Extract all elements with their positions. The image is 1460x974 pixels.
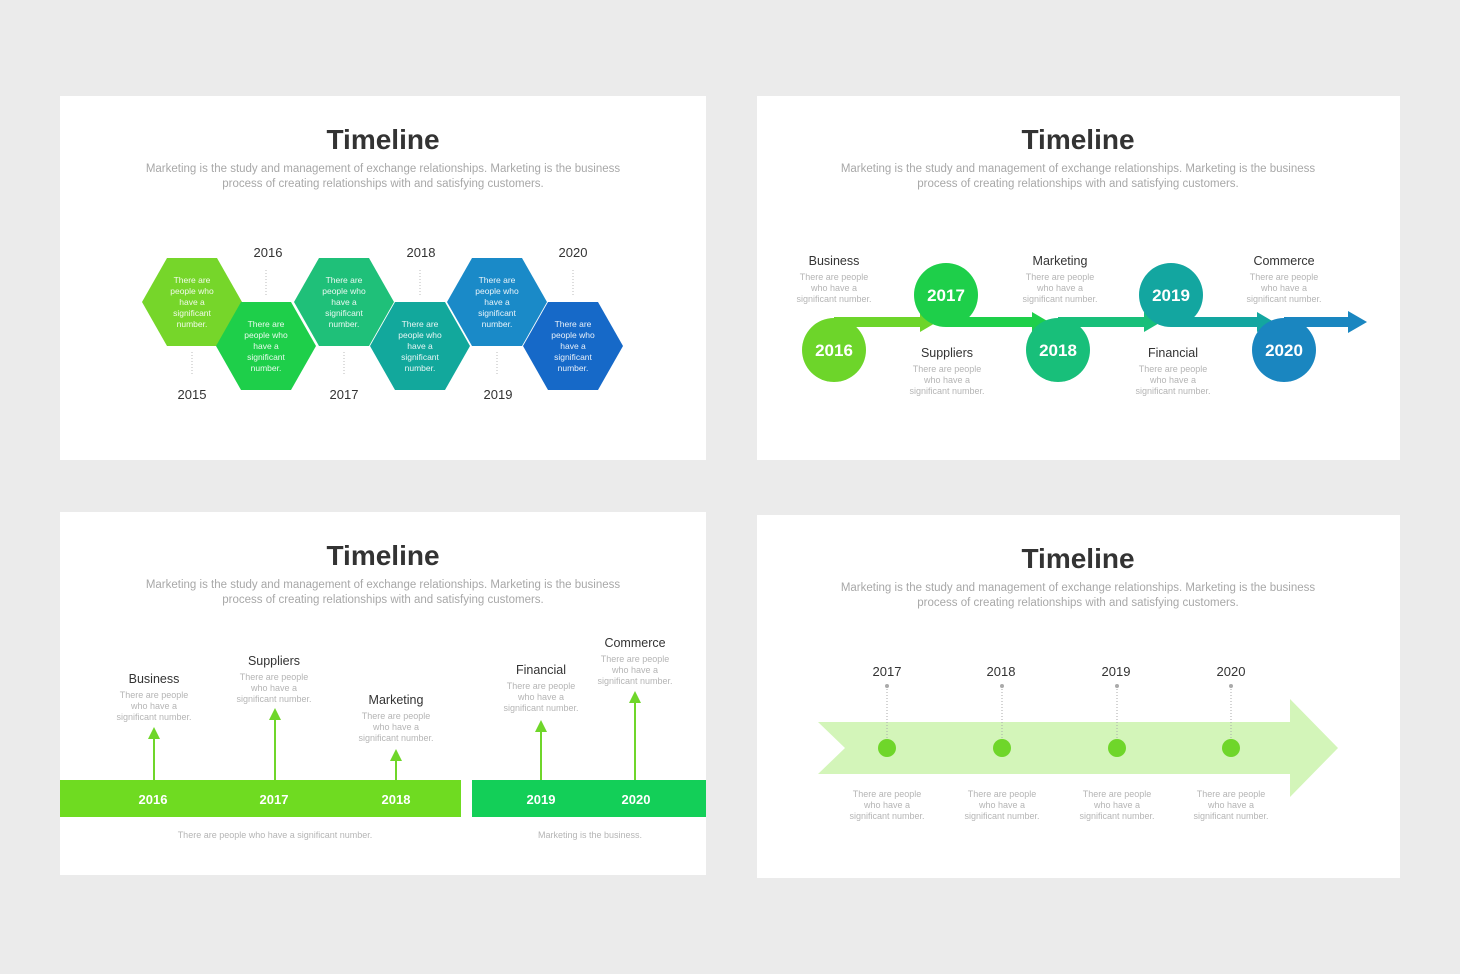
milestones: 2017 [873, 664, 901, 679]
labels: who have a [810, 283, 857, 293]
hexagons: have a [407, 341, 433, 351]
milestones: who have a [978, 800, 1025, 810]
hexagons: people who [475, 286, 519, 296]
subtitle: process of creating relationships with and satisfying customers. [222, 178, 544, 190]
title: Timeline [326, 124, 440, 155]
milestones: There are people [1197, 789, 1265, 799]
hexagons: There are [479, 275, 516, 285]
milestones: There are people [853, 789, 921, 799]
subtitle [841, 582, 1315, 609]
circles: 2020 [1265, 341, 1303, 360]
milestones: 2019 [1102, 664, 1130, 679]
hexagons: have a [331, 297, 357, 307]
hexagons: number. [558, 363, 588, 373]
labels: Suppliers [248, 654, 300, 668]
labels: There are people [1139, 364, 1207, 374]
labels: significant number. [796, 294, 872, 304]
subtitle: Marketing is the study and management of exchange relationships. Marketing is the business [841, 163, 1315, 175]
milestones [849, 664, 1269, 821]
hexagons: number. [405, 363, 435, 373]
hexagons: There are [402, 319, 439, 329]
milestones: 2018 [987, 664, 1015, 679]
milestones: There are people [1083, 789, 1151, 799]
subtitle: process of creating relationships with and satisfying customers. [917, 597, 1239, 609]
hexagons [142, 258, 623, 390]
bars: 2017 [260, 792, 288, 807]
milestones: significant number. [849, 811, 925, 821]
labels: There are people [120, 690, 188, 700]
labels: There are people [800, 272, 868, 282]
labels: significant number. [358, 733, 434, 743]
year labels [178, 245, 587, 402]
subtitle: Marketing is the study and management of exchange relationships. Marketing is the business [146, 579, 620, 591]
labels: who have a [1260, 283, 1307, 293]
labels: Business [129, 672, 179, 686]
arrows up [154, 697, 635, 780]
subtitle: process of creating relationships with and satisfying customers. [917, 178, 1239, 190]
year labels: 2015 [178, 387, 206, 402]
labels: Marketing is the business. [538, 830, 642, 840]
labels: significant number. [236, 694, 312, 704]
panel: circle arrow timeline [757, 96, 1400, 460]
labels: who have a [611, 665, 658, 675]
milestones: There are people [968, 789, 1036, 799]
labels: There are people who have a significant number. [178, 830, 372, 840]
hexagons: have a [560, 341, 586, 351]
labels: Marketing [1033, 254, 1087, 268]
labels: Commerce [1253, 254, 1315, 268]
milestones: significant number. [964, 811, 1040, 821]
hexagons: people who [398, 330, 442, 340]
milestones: significant number. [1079, 811, 1155, 821]
panel: hexagon timeline [60, 96, 706, 460]
subtitle: process of creating relationships with and satisfying customers. [222, 594, 544, 606]
milestones: significant number. [1193, 811, 1269, 821]
hexagons: people who [244, 330, 288, 340]
title: Timeline [1021, 543, 1135, 574]
labels: significant number. [909, 386, 985, 396]
milestones: 2020 [1217, 664, 1245, 679]
hexagons: have a [179, 297, 205, 307]
milestones: who have a [863, 800, 910, 810]
hexagons: have a [253, 341, 279, 351]
labels: There are people [913, 364, 981, 374]
hexagons: people who [551, 330, 595, 340]
milestones: who have a [1207, 800, 1254, 810]
year labels: 2018 [407, 245, 435, 260]
bars [60, 780, 706, 817]
year labels: 2020 [559, 245, 587, 260]
circles: 2018 [1039, 341, 1077, 360]
labels: who have a [250, 683, 297, 693]
big arrow [818, 699, 1338, 797]
labels: significant number. [1135, 386, 1211, 396]
hexagons: There are [248, 319, 285, 329]
labels: significant number. [503, 703, 579, 713]
labels: who have a [923, 375, 970, 385]
milestones: who have a [1093, 800, 1140, 810]
hexagons: number. [251, 363, 281, 373]
circles [802, 263, 1316, 382]
labels: There are people [240, 672, 308, 682]
hexagons: have a [484, 297, 510, 307]
labels: There are people [1250, 272, 1318, 282]
hexagons: significant [478, 308, 517, 318]
labels: There are people [362, 711, 430, 721]
labels [796, 254, 1322, 396]
labels: Financial [516, 663, 566, 677]
labels: who have a [1036, 283, 1083, 293]
hexagons: people who [170, 286, 214, 296]
title: Timeline [326, 540, 440, 571]
hexagons: significant [247, 352, 286, 362]
hexagons: significant [173, 308, 212, 318]
hexagons: There are [326, 275, 363, 285]
labels [116, 636, 673, 840]
hexagons: people who [322, 286, 366, 296]
labels: There are people [601, 654, 669, 664]
labels: Marketing [369, 693, 423, 707]
labels: Suppliers [921, 346, 973, 360]
hexagons: significant [554, 352, 593, 362]
labels: significant number. [597, 676, 673, 686]
labels: who have a [130, 701, 177, 711]
circles: 2016 [815, 341, 853, 360]
hexagons: number. [329, 319, 359, 329]
arrows [834, 311, 1367, 333]
labels: significant number. [116, 712, 192, 722]
subtitle [146, 163, 620, 190]
year labels: 2016 [254, 245, 282, 260]
hexagons: number. [482, 319, 512, 329]
subtitle [841, 163, 1315, 190]
subtitle: Marketing is the study and management of exchange relationships. Marketing is the business [841, 582, 1315, 594]
labels: There are people [507, 681, 575, 691]
labels: who have a [372, 722, 419, 732]
subtitle: Marketing is the study and management of exchange relationships. Marketing is the business [146, 163, 620, 175]
hexagons: There are [555, 319, 592, 329]
labels: Financial [1148, 346, 1198, 360]
bars: 2018 [382, 792, 410, 807]
title: Timeline [1021, 124, 1135, 155]
hexagons: significant [325, 308, 364, 318]
circles: 2017 [927, 286, 965, 305]
hexagons: significant [401, 352, 440, 362]
panel: bar timeline [60, 512, 706, 875]
bars: 2016 [139, 792, 167, 807]
year labels: 2017 [330, 387, 358, 402]
year labels: 2019 [484, 387, 512, 402]
labels: significant number. [1022, 294, 1098, 304]
subtitle [146, 579, 620, 606]
bars: 2020 [622, 792, 650, 807]
hexagons: There are [174, 275, 211, 285]
labels: significant number. [1246, 294, 1322, 304]
panel: big arrow timeline [757, 515, 1400, 878]
labels: who have a [1149, 375, 1196, 385]
labels: There are people [1026, 272, 1094, 282]
circles: 2019 [1152, 286, 1190, 305]
hexagons: number. [177, 319, 207, 329]
labels: who have a [517, 692, 564, 702]
bars: 2019 [527, 792, 555, 807]
labels: Business [809, 254, 859, 268]
labels: Commerce [604, 636, 666, 650]
